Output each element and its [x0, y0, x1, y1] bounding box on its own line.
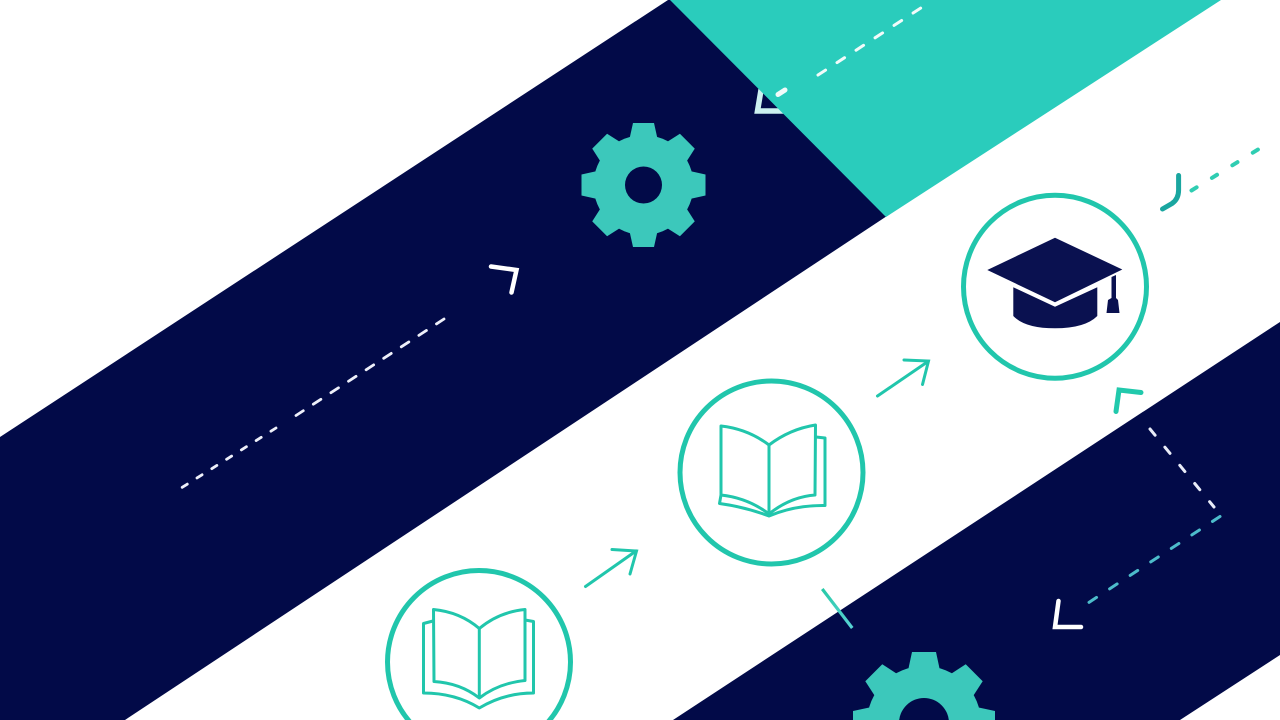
arrow: white dashed line upper band: [178, 319, 444, 490]
arrow: teal dashed line upper right: [1192, 150, 1258, 190]
panel: upper navy diagonal band: [0, 0, 890, 720]
arrow: second book to graduation cap: [878, 360, 928, 396]
arrow: first to second book: [586, 550, 636, 586]
icon: white chevron upper band: [491, 266, 516, 292]
arrow: blue dashed line lower band: [1086, 516, 1220, 604]
icon: pale chevron behind teal panel: [758, 87, 790, 111]
arrow: white dashed line on teal: [778, 2, 930, 94]
icon: gear upper: [582, 123, 706, 247]
icon: small crossing tick: [821, 588, 854, 629]
panel: lower navy diagonal band: [673, 322, 1280, 720]
icon: first book in circle: [388, 570, 570, 720]
icon: white chevron lower band: [1055, 601, 1081, 627]
icon: graduation cap in circle: [964, 195, 1146, 378]
icon: dark teal curved chevron: [1162, 176, 1179, 209]
icon: teal chevron: [1116, 390, 1141, 412]
icon: second book in circle: [680, 381, 863, 564]
panel: teal triangle: [670, 0, 1221, 217]
arrow: white dashed line lower band: [1150, 429, 1214, 507]
icon: gear lower: [853, 652, 995, 720]
